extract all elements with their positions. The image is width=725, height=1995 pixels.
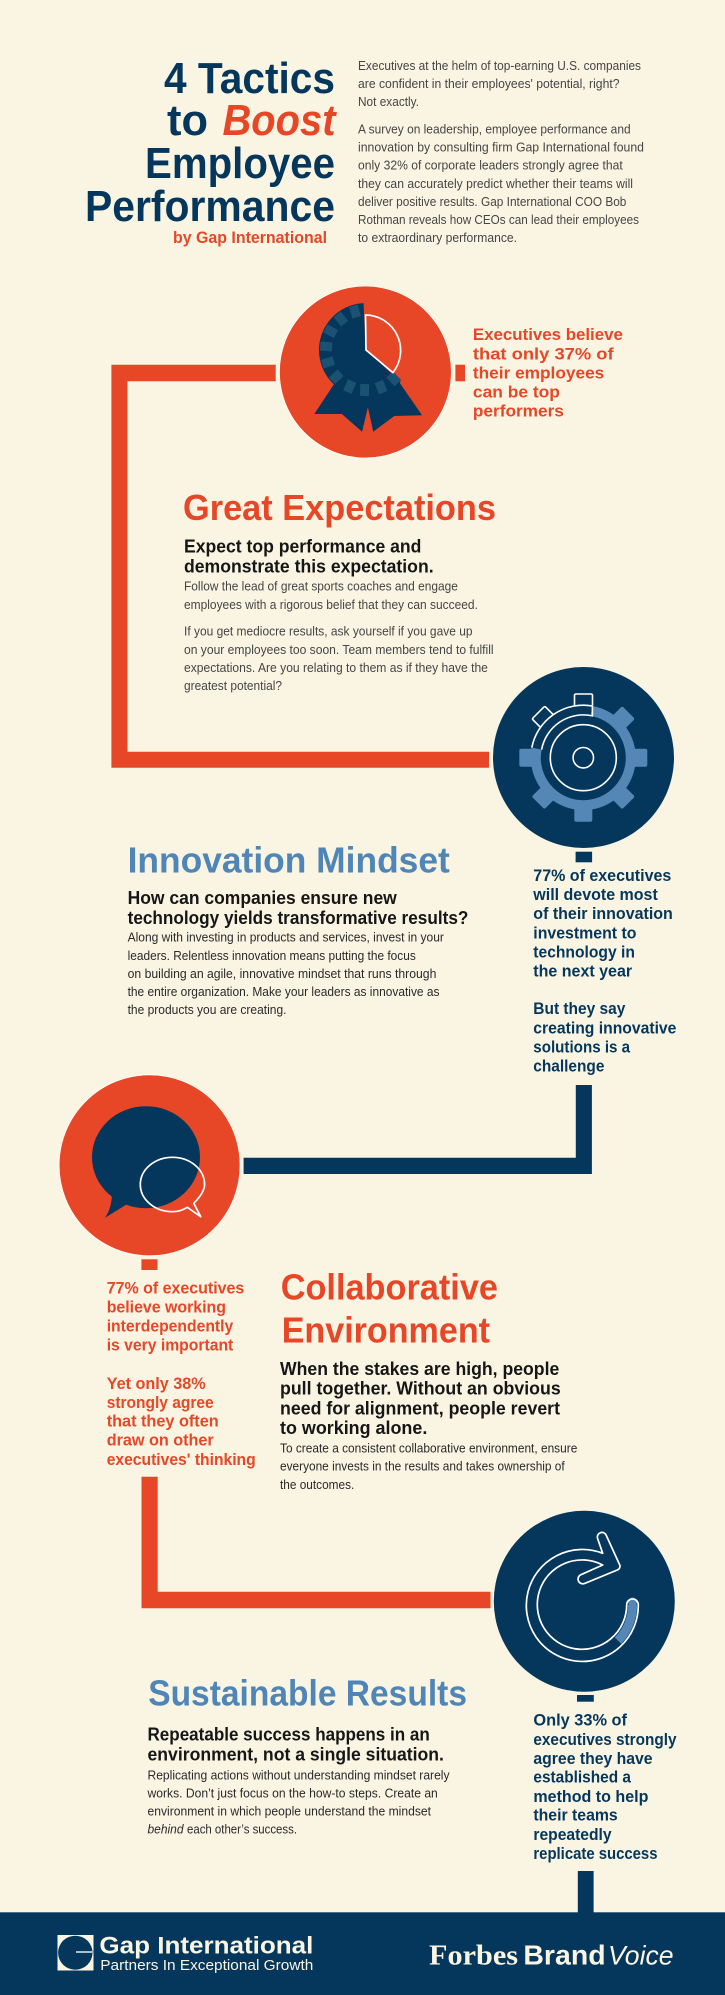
panel: collaborative environment: [280, 1266, 577, 1492]
body text: collaborative environment: everyone invests in the results and takes ownership of: [280, 1460, 565, 1474]
subheading: great expectations: demonstrate this expectation.: [184, 556, 434, 576]
callout: 77 percent technology: [532, 867, 676, 1076]
callout: 37 percent: Executives believe: [473, 326, 623, 344]
callout: 33 percent: repeatedly: [533, 1826, 612, 1844]
callout: 77 percent interdependent: draw on other: [107, 1432, 214, 1450]
callout: 77 percent interdependent: strongly agree: [107, 1394, 214, 1412]
title: Performance: [85, 182, 335, 231]
body text: innovation mindset: the entire organization. Make your leaders as innovative as: [128, 985, 439, 999]
body text: great expectations: If you get mediocre results, ask yourself if you gave up: [184, 625, 473, 639]
body text: great expectations: [184, 580, 494, 693]
callout: 77 percent interdependent: 77% of executives: [107, 1279, 244, 1297]
logo: Gap International: Partners In Exceptional Growth: [100, 1958, 313, 1974]
connector: orange bracket to loop icon: [142, 1477, 490, 1608]
intro text: deliver positive results. Gap International COO Bob: [358, 195, 626, 209]
title: Employee: [145, 139, 335, 188]
callout: 33 percent: method to help: [533, 1788, 648, 1806]
heading: innovation mindset: Innovation Mindset: [128, 839, 450, 880]
callout: 77 percent technology: the next year: [533, 962, 633, 980]
title: Boost: [222, 96, 338, 145]
subheading: innovation mindset: [128, 888, 468, 928]
body text: great expectations: employees with a rigorous belief that they can succeed.: [184, 598, 478, 612]
callout: 77 percent interdependent: that they often: [107, 1413, 219, 1431]
logo: Forbes BrandVoice: Brand: [523, 1939, 606, 1970]
body text: collaborative environment: [280, 1441, 577, 1492]
connector: navy bracket to speech bubbles: [244, 1085, 592, 1174]
body text: collaborative environment: To create a consistent collaborative environment, ensure: [280, 1441, 577, 1455]
logo: Gap International: Gap International: [99, 1932, 313, 1959]
callout: 77 percent technology: technology in: [533, 943, 635, 961]
intro text: are confident in their employees' potential, right?: [358, 77, 620, 91]
body text: innovation mindset: the products you are creating.: [128, 1003, 286, 1017]
body text: great expectations: on your employees too soon. Team members tend to fulfill: [184, 643, 494, 657]
icon: gear in navy circle: [493, 667, 674, 848]
body text: sustainable results: behind: [148, 1822, 184, 1836]
connector stub: navy: [576, 852, 592, 862]
body text: sustainable results: each other’s success.: [187, 1822, 297, 1836]
callout: 77 percent technology: 77% of executives: [533, 867, 671, 885]
icon: ribbon in orange circle: [279, 286, 451, 458]
callout: 33 percent: Only 33% of: [533, 1712, 628, 1730]
subheading: collaborative environment: need for alignment, people revert: [280, 1398, 560, 1418]
subheading: great expectations: [184, 537, 434, 576]
callout: 37 percent: their employees: [473, 364, 604, 382]
icon: speech bubbles in orange circle: [59, 1075, 240, 1256]
body text: innovation mindset: Along with investing in products and services, invest in your: [128, 931, 444, 945]
callout: 33 percent: their teams: [533, 1807, 618, 1825]
heading: great expectations: Great Expectations: [183, 487, 496, 528]
title: to: [167, 96, 208, 145]
logo: Forbes BrandVoice: Forbes: [429, 1939, 518, 1971]
callout: 77 percent technology: investment to: [533, 924, 637, 942]
body text: sustainable results: Replicating actions without understanding mindset rarely: [148, 1768, 450, 1782]
heading: collaborative environment: Collaborative: [281, 1266, 498, 1307]
subheading: collaborative environment: pull together. Without an obvious: [280, 1378, 561, 1398]
callout: 77 percent interdependent: interdependently: [107, 1318, 233, 1336]
title: [85, 54, 338, 247]
callout: 33 percent: [533, 1712, 676, 1863]
subheading: innovation mindset: How can companies ensure new: [128, 888, 398, 908]
icon: loop arrow in navy circle: [494, 1511, 675, 1692]
footer band: [0, 1912, 725, 1995]
logo: Forbes BrandVoice: Voice: [608, 1940, 674, 1970]
body text: innovation mindset: leaders. Relentless innovation means putting the focus: [128, 949, 416, 963]
subheading: sustainable results: Repeatable success happens in an: [148, 1725, 430, 1745]
intro text: Executives at the helm of top-earning U.S. companies: [358, 59, 641, 73]
callout: 77 percent interdependent: believe working: [107, 1299, 226, 1317]
body text: innovation mindset: [128, 931, 444, 1017]
panel: sustainable results: [147, 1673, 467, 1836]
subheading: collaborative environment: to working alone.: [280, 1418, 427, 1438]
callout: 33 percent: agree they have: [533, 1750, 653, 1768]
intro text: Not exactly.: [358, 95, 419, 109]
callout: 37 percent: can be top: [473, 383, 560, 401]
callout: 77 percent interdependent: Yet only 38%: [107, 1375, 206, 1393]
intro text: innovation by consulting firm Gap International found: [358, 140, 644, 154]
body text: innovation mindset: on building an agile, innovative mindset that runs through: [128, 967, 436, 981]
callout: 33 percent: established a: [533, 1769, 632, 1787]
connector stub: orange: [141, 1259, 158, 1270]
callout: 33 percent: executives strongly: [533, 1731, 676, 1749]
intro text: they can accurately predict whether their teams will: [358, 177, 633, 191]
connector: navy line into footer: [578, 1871, 594, 1913]
heading: sustainable results: Sustainable Results: [148, 1673, 467, 1714]
callout: 77 percent interdependent: executives' thinking: [107, 1451, 256, 1469]
connector stub: orange: [455, 365, 465, 381]
logo: Gap International: [58, 1932, 313, 1974]
intro text: Rothman reveals how CEOs can lead their employees: [358, 213, 639, 227]
body text: sustainable results: [147, 1768, 450, 1836]
title: 4 Tactics: [164, 54, 335, 103]
intro text: A survey on leadership, employee performance and: [358, 122, 631, 136]
body text: great expectations: Follow the lead of great sports coaches and engage: [184, 580, 458, 594]
callout: 77 percent technology: challenge: [533, 1058, 604, 1076]
body text: great expectations: greatest potential?: [184, 679, 282, 693]
callout: 77 percent technology: But they say: [533, 1000, 625, 1018]
callout: 77 percent interdependent: is very important: [107, 1337, 234, 1355]
heading: collaborative environment: [281, 1266, 498, 1351]
callout: 37 percent: performers: [473, 402, 564, 420]
intro text: to extraordinary performance.: [358, 231, 517, 245]
callout: 37 percent: that only 37% of: [473, 345, 614, 363]
heading: collaborative environment: Environment: [282, 1310, 490, 1351]
callout: 33 percent: replicate success: [533, 1845, 658, 1863]
callout: 77 percent technology: solutions is a: [533, 1038, 631, 1056]
subheading: great expectations: Expect top performance and: [184, 537, 421, 557]
connector: orange bracket from ribbon to gear: [111, 365, 489, 768]
intro text: [358, 59, 644, 245]
body text: collaborative environment: the outcomes.: [280, 1478, 354, 1492]
callout: 77 percent technology: of their innovation: [533, 905, 673, 923]
callout: 77 percent interdependent: [107, 1279, 256, 1469]
subheading: innovation mindset: technology yields transformative results?: [128, 908, 468, 928]
logo: Forbes BrandVoice: [429, 1939, 674, 1971]
title: by Gap International: [173, 228, 327, 247]
intro text: only 32% of corporate leaders strongly agree that: [358, 159, 623, 173]
body text: great expectations: expectations. Are you relating to them as if they have the: [184, 661, 488, 675]
callout: 37 percent: [473, 326, 623, 420]
subheading: collaborative environment: When the stakes are high, people: [280, 1359, 559, 1379]
subheading: sustainable results: environment, not a single situation.: [148, 1745, 444, 1765]
panel: innovation mindset: [128, 839, 468, 1017]
callout: 77 percent technology: will devote most: [532, 886, 658, 904]
connector stub: navy: [577, 1695, 594, 1702]
callout: 77 percent technology: creating innovative: [533, 1019, 676, 1037]
subheading: sustainable results: [148, 1725, 444, 1765]
panel: great expectations: [183, 487, 496, 693]
subheading: collaborative environment: [280, 1359, 561, 1438]
body text: sustainable results: environment in which people understand the mindset: [148, 1804, 432, 1818]
body text: sustainable results: works. Don’t just focus on the how-to steps. Create an: [147, 1786, 438, 1800]
